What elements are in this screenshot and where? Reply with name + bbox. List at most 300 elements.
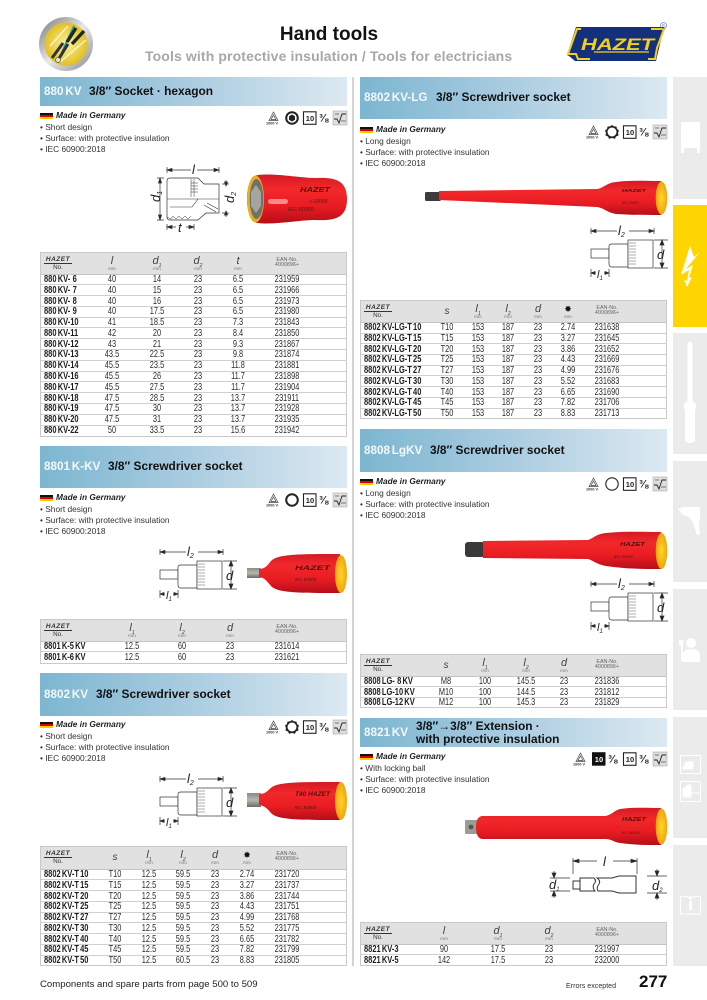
table rows: 231782 (275, 934, 299, 945)
table rows: 27.5 (150, 382, 164, 393)
table rows: 8821 KV-5 (364, 955, 399, 966)
table header: 4000896+ (275, 856, 299, 862)
table rows: 23 (211, 880, 219, 891)
table rows: 47.5 (105, 414, 119, 425)
table rows: 231768 (275, 912, 299, 923)
table rows: 23 (194, 425, 202, 436)
table rows: 8802 KV-LG-T 50 (364, 408, 421, 419)
table rows: 8802 KV-LG-T 10 (364, 322, 421, 333)
product features: • Surface: with protective insulation (40, 514, 170, 524)
table header: mm (211, 860, 219, 865)
feature icons: 1000 V (266, 122, 279, 126)
table header: No. (373, 934, 383, 941)
banner: 8808 LgKV: 3/8″ Screwdriver socket (430, 443, 565, 457)
table rows: T25 (109, 901, 121, 912)
product features: Made in Germany (56, 492, 126, 502)
technical drawing: screwdriver socket dimensions: l (166, 817, 168, 829)
technical drawing: screwdriver socket dimensions: l (187, 544, 190, 559)
table rows: 23 (194, 349, 202, 360)
table rows: M12 (439, 697, 453, 708)
table rows: 21 (153, 339, 161, 350)
table rows: 59.5 (176, 880, 190, 891)
table rows: 23 (211, 890, 219, 902)
banner: 8808 LgKV: 8808 LgKV (364, 444, 422, 457)
product features (40, 492, 170, 536)
table rows: 231720 (275, 869, 299, 880)
table rows: T30 (109, 923, 121, 934)
table: 8801 K-KV sizes (40, 619, 347, 664)
table rows: T25 (441, 354, 453, 365)
table rows: 187 (502, 354, 514, 365)
photo: insulated torx-bit socket: IEC 60900 (295, 805, 317, 810)
table rows: 12.5 (142, 944, 156, 955)
table header: s (444, 306, 450, 317)
table header: mm (481, 668, 489, 673)
table rows: 231669 (595, 354, 619, 365)
table: 8802 KV-LG sizes (360, 300, 667, 419)
banner: 8802 KV (40, 673, 347, 716)
drawing labels: l (192, 162, 196, 177)
table rows: 23 (211, 934, 219, 945)
table rows: 22.5 (150, 349, 164, 360)
table header: d (212, 849, 218, 861)
table header: d (227, 622, 233, 634)
table rows: 33.5 (150, 425, 164, 436)
table rows (361, 676, 666, 708)
table rows: 231645 (595, 333, 619, 344)
table header: mm (108, 266, 116, 271)
drawing labels (148, 162, 238, 235)
table rows: 6.5 (233, 285, 243, 296)
table rows: 880 KV-17 (44, 382, 79, 393)
product features: • Surface: with protective insulation (40, 742, 170, 752)
table rows: 880 KV-22 (44, 425, 79, 436)
product features: • Surface: with protective insulation (40, 132, 170, 142)
table header: d2 (545, 925, 553, 939)
table rows: 187 (502, 322, 514, 333)
banner: 8821 KV (360, 718, 667, 747)
table rows: 231966 (275, 285, 299, 296)
table rows: 23 (194, 393, 202, 404)
product features: • Short design (40, 730, 92, 740)
feature icons: 10 (626, 128, 634, 137)
drawing labels: t (178, 220, 183, 235)
table header: d1 (494, 925, 502, 939)
banner: 8802 KV-LG: 3/8″ Screwdriver socket (436, 90, 571, 104)
table rows: 43.5 (105, 349, 119, 360)
table header: s (444, 660, 448, 671)
drawing labels: d (222, 196, 237, 203)
table rows: 880 KV-12 (44, 339, 79, 350)
table rows: 59.5 (176, 869, 190, 880)
table rows: 3.27 (561, 333, 575, 344)
product features (40, 719, 170, 762)
table rows: T40 (441, 387, 453, 398)
table rows (41, 869, 346, 966)
table rows: T10 (109, 869, 121, 880)
table rows: 11.7 (231, 382, 245, 393)
feature icons: ⅜ (639, 126, 649, 138)
table rows: 880 KV-14 (44, 360, 79, 371)
table rows: 144.5 (517, 687, 535, 698)
table rows: 2.74 (561, 322, 575, 333)
table rows: 153 (472, 397, 484, 408)
table rows: 880 KV- 7 (44, 285, 77, 296)
table rows: 7.82 (240, 944, 254, 955)
table rows: 23 (560, 676, 568, 687)
table rows: 23 (560, 697, 568, 708)
table rows: 145.3 (517, 697, 535, 708)
drawing labels: d (148, 195, 163, 202)
table header: mm (178, 633, 186, 638)
table header: 4000896+ (595, 932, 619, 938)
table header: 4000896+ (595, 310, 619, 316)
technical drawing: screwdriver socket dimensions: 2 (189, 780, 194, 787)
table rows: 12.5 (142, 901, 156, 912)
panel: 8802 KV screwdriver socket (40, 673, 348, 966)
banner: 8802 KV-LG: 8802 KV-LG (364, 91, 427, 104)
table rows: 8808 LG-10 KV (364, 687, 415, 698)
table rows: 231751 (275, 901, 299, 912)
table header: s (112, 852, 118, 863)
footer: errors excepted: Errors excepted (566, 982, 616, 990)
table rows: 14 (153, 274, 161, 285)
table header: mm (234, 266, 242, 271)
table rows: T50 (441, 408, 453, 419)
technical drawing: screwdriver socket dimensions: l (187, 771, 190, 786)
table rows: 30 (153, 403, 161, 414)
product features: • Short design (40, 122, 92, 132)
table rows: T27 (441, 365, 453, 376)
banner: 880 KV (40, 77, 347, 106)
table rows: 8802 KV-LG-T 45 (364, 397, 421, 408)
table rows: 8808 LG- 8 KV (364, 676, 413, 687)
side tab: insulated electrician tools (active) (673, 205, 707, 327)
table rows: 23.5 (150, 360, 164, 371)
table rows: 153 (472, 354, 484, 365)
table rows: 187 (502, 333, 514, 344)
table header: No. (53, 858, 63, 865)
table rows: 153 (472, 344, 484, 355)
table header: EAN-No. (596, 927, 618, 933)
table rows: 8801 K-6 KV (44, 652, 86, 663)
table rows: 23 (211, 869, 219, 880)
technical drawing: screwdriver socket dimensions (591, 223, 668, 282)
feature icons: ⅜ (639, 478, 649, 490)
table rows: 7.3 (233, 317, 243, 328)
table header: mm (545, 936, 553, 941)
product features (360, 476, 490, 520)
table rows: 187 (502, 397, 514, 408)
table rows: 23 (211, 912, 219, 923)
table header: EAN-No. (276, 624, 298, 630)
table rows: 40 (108, 296, 116, 306)
logo: HAZET (566, 22, 667, 61)
table rows: 60 (178, 652, 186, 663)
table rows: 100 (479, 697, 491, 708)
table rows: 8802 KV-LG-T 15 (364, 333, 421, 344)
table rows: 880 KV-11 (44, 328, 78, 339)
table rows: 12.5 (142, 912, 156, 923)
technical drawing: screwdriver socket dimensions (591, 576, 668, 635)
table rows: 45.5 (105, 371, 119, 382)
table rows: 40 (108, 306, 116, 317)
table header: mm (128, 633, 136, 638)
feature icons: ⅜ (319, 722, 329, 734)
table rows: 231843 (275, 317, 299, 328)
product features: Made in Germany (56, 110, 126, 120)
table rows: 26 (153, 371, 161, 382)
product features: • IEC 60900:2018 (360, 158, 426, 168)
table rows: 3.86 (240, 890, 254, 902)
table header: mm (440, 936, 448, 941)
table header: l2 (505, 303, 511, 317)
table rows (41, 641, 346, 663)
table rows: 42 (108, 328, 116, 339)
table rows: 23 (534, 408, 542, 419)
table rows: 880 KV- 9 (44, 306, 77, 317)
table header (41, 847, 346, 870)
banner: 8801 K-KV (40, 446, 347, 488)
table rows: 8802 KV-LG-T 30 (364, 376, 421, 387)
banner: 8802 KV: 3/8″ Screwdriver socket (96, 687, 231, 701)
table header: l1 (146, 849, 152, 863)
table rows: 59.5 (176, 934, 190, 945)
table header: HAZET (46, 850, 70, 857)
table rows: 8802 KV-T 25 (44, 901, 88, 912)
table rows: 231744 (275, 890, 299, 902)
product features: • IEC 60900:2018 (40, 752, 106, 762)
table rows: 18.5 (150, 317, 164, 328)
photo: long insulated torx socket: IEC 60900 (622, 201, 639, 205)
table header: mm (145, 860, 153, 865)
table header: ✸ (243, 850, 251, 860)
table rows: 23 (534, 376, 542, 387)
photo: insulated square-bit socket: HAZET (295, 565, 332, 572)
table rows: 8821 KV-3 (364, 944, 399, 955)
table header: mm (494, 936, 502, 941)
table header: mm (504, 314, 512, 319)
table rows (41, 274, 346, 436)
table header: d1 (153, 255, 161, 269)
table rows: 23 (194, 296, 202, 306)
technical drawing: screwdriver socket dimensions: d (657, 600, 665, 615)
table rows: 23 (194, 382, 202, 393)
photo: insulated hexagon socket: IEC 60900 (288, 207, 314, 213)
table header: No. (373, 312, 383, 319)
logo: HAZET: HAZET (581, 35, 656, 54)
table rows: 15 (153, 285, 161, 296)
photo: insulated square-bit socket: IEC 60900 (295, 577, 317, 582)
table rows: 100 (479, 676, 491, 687)
table rows: 59.5 (176, 912, 190, 923)
table rows (361, 322, 666, 419)
table rows: 880 KV-13 (44, 349, 79, 360)
table rows: 4.43 (240, 901, 254, 912)
table rows: 12.5 (142, 923, 156, 934)
table rows: 153 (472, 322, 484, 333)
icon: round tools emblem (39, 17, 93, 71)
feature icons: 1000 V (586, 488, 599, 492)
table rows: 60 (178, 641, 186, 652)
table rows: 232000 (595, 955, 619, 966)
technical drawing: screwdriver socket dimensions: 1 (599, 629, 603, 635)
photo: insulated torx-bit socket: T40 HAZET (295, 792, 331, 798)
banner: 8802 KV: 8802 KV (44, 688, 88, 701)
table rows: 23 (211, 923, 219, 934)
table rows: 59.5 (176, 923, 190, 934)
table rows: 153 (472, 365, 484, 376)
table header: mm (226, 633, 234, 638)
feature icons: 10 (306, 114, 314, 123)
product features: • Short design (40, 504, 92, 514)
table header: l (443, 925, 445, 937)
table rows: 3.86 (561, 344, 575, 355)
table rows: 153 (472, 376, 484, 387)
technical drawing: screwdriver socket dimensions: d (657, 247, 665, 262)
banner: 8802 KV-LG (360, 77, 667, 119)
table rows: 40 (108, 285, 116, 296)
table rows: 8802 KV-T 40 (44, 934, 88, 945)
table rows: 153 (472, 333, 484, 344)
product features: • Long design (360, 136, 411, 146)
table header: No. (53, 264, 63, 271)
table rows: T50 (109, 955, 121, 966)
panel: 880 KV socket hexagon (40, 77, 348, 437)
table rows: 16 (153, 296, 161, 306)
table rows: 187 (502, 387, 514, 398)
table rows: 12.5 (142, 890, 156, 902)
table rows (361, 944, 666, 966)
table rows: 231959 (275, 274, 299, 285)
table rows: 231836 (595, 676, 619, 687)
feature icons (586, 477, 667, 492)
feature icons (586, 125, 667, 140)
table rows: 880 KV-19 (44, 403, 79, 414)
product features: • Surface: with protective insulation (360, 498, 490, 508)
photo: insulated square-bit socket (247, 554, 347, 593)
banner: 880 KV: 3/8″ Socket · hexagon (89, 84, 213, 98)
table rows: 4.99 (561, 365, 575, 376)
table rows: 6.65 (240, 934, 254, 945)
table rows: 231652 (595, 344, 619, 355)
table rows: 17.5 (491, 944, 505, 955)
technical drawing: screwdriver socket dimensions: d (226, 795, 234, 810)
product features: • IEC 60900:2018 (40, 144, 106, 154)
table rows: 187 (502, 344, 514, 355)
table rows: 23 (534, 354, 542, 365)
table header: mm (522, 668, 530, 673)
table rows: 23 (534, 333, 542, 344)
side tab: screwdrivers (673, 333, 707, 454)
banner: 8808 LgKV (360, 429, 667, 472)
table rows: T15 (441, 333, 453, 344)
table rows: 100 (479, 687, 491, 698)
photo: insulated hexagon socket: HAZET (300, 187, 331, 194)
technical drawing: screwdriver socket dimensions: l (166, 590, 168, 602)
banner: 8801 K-KV: 3/8″ Screwdriver socket (108, 459, 243, 473)
table rows: 8802 KV-T 20 (44, 890, 88, 902)
side tab: vehicle tools (673, 717, 707, 838)
table header: ✸ (564, 304, 572, 314)
table header: 4000896+ (275, 262, 299, 268)
table rows: 41 (108, 317, 116, 328)
table rows: 231775 (275, 923, 299, 934)
table rows: 8802 KV-LG-T 27 (364, 365, 421, 376)
footer: spare parts note: Components and spare parts from page 500 to 509 (40, 979, 258, 990)
table rows: 45.5 (105, 360, 119, 371)
table header: EAN-No. (276, 257, 298, 263)
table rows: 45.5 (105, 382, 119, 393)
feature icons: 10 (306, 723, 314, 732)
feature icons: 10 (595, 755, 603, 764)
table rows: 880 KV-10 (44, 317, 79, 328)
table rows: 8802 KV-T 27 (44, 912, 88, 923)
product features: Made in Germany (56, 719, 126, 729)
feature icons: ⅜ (319, 494, 329, 506)
table header (361, 655, 666, 676)
table rows: 8801 K-5 KV (44, 641, 86, 652)
table rows: 23 (194, 328, 202, 339)
subtitle: Tools with protective insulation / Tools for electricians (145, 48, 512, 64)
panel: 8801 K-KV screwdriver socket (40, 446, 348, 664)
table rows: 23 (194, 306, 202, 317)
side tab: power tools (673, 461, 707, 582)
drawing labels: 2 (231, 192, 238, 197)
table rows: 13.7 (231, 414, 245, 425)
product features: • IEC 60900:2018 (360, 784, 426, 794)
page number: 277 (639, 972, 667, 991)
table rows: 231805 (275, 955, 299, 966)
banner: 8801 K-KV: 8801 K-KV (44, 460, 100, 473)
table rows: 880 KV- 6 (44, 274, 77, 285)
feature icons: 10 (626, 755, 634, 764)
feature icons: ⅜ (319, 112, 329, 124)
table rows: 6.5 (233, 296, 243, 306)
table rows: 13.7 (231, 393, 245, 404)
technical drawing: screwdriver socket dimensions: 2 (620, 232, 625, 239)
feature icons: 1000 V (573, 762, 586, 766)
table rows: 231638 (595, 322, 619, 333)
table header: EAN-No. (276, 851, 298, 857)
product features: Made in Germany (376, 124, 446, 134)
product features: • Surface: with protective insulation (360, 774, 490, 784)
table rows: 8802 KV-T 45 (44, 944, 88, 955)
table rows: M10 (439, 687, 453, 698)
technical drawing: extension dimensions (549, 854, 667, 900)
panel: 8821 KV extension (360, 718, 668, 966)
technical drawing: extension dimensions: d (549, 877, 556, 892)
table: 8821 KV sizes (360, 922, 667, 966)
table: 880 KV sizes (40, 252, 347, 437)
product features: • Surface: with protective insulation (360, 146, 490, 156)
technical drawing: screwdriver socket dimensions: l (618, 576, 621, 591)
feature icons: ⅜ (608, 754, 618, 766)
table rows: T40 (109, 934, 121, 945)
side tab: workshop equipment (673, 589, 707, 710)
table rows: 8802 KV-LG-T 20 (364, 344, 421, 355)
photo: long insulated spline socket: HAZET (620, 542, 646, 548)
photo: long insulated spline socket (465, 532, 667, 569)
table header (361, 301, 666, 323)
table rows: 23 (534, 365, 542, 376)
table rows: 17.5 (150, 306, 164, 317)
table rows: 187 (502, 408, 514, 419)
feature icons: 10 (626, 480, 634, 489)
table rows: 11.8 (231, 360, 245, 371)
feature icons (573, 752, 667, 766)
photo: long insulated torx socket: HAZET (622, 188, 648, 193)
